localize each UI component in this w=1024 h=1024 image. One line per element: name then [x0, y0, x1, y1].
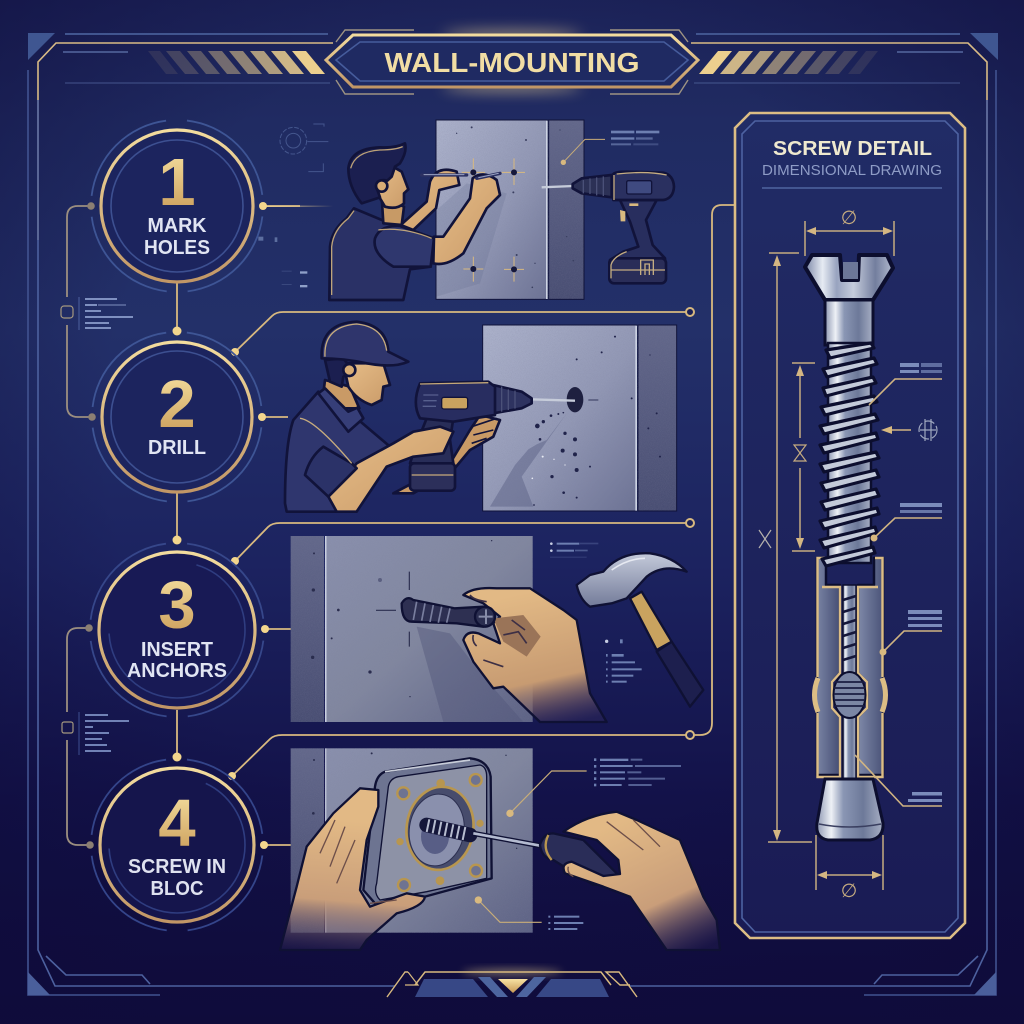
threaded part [828, 343, 871, 563]
step 3 badge: INSERT [141, 639, 213, 661]
step 4 badge [91, 759, 263, 931]
step 1 badge [91, 120, 263, 292]
header: title plate [148, 30, 878, 94]
head [805, 255, 893, 300]
hammer [577, 553, 703, 707]
panel: screw detail [735, 113, 965, 938]
screw [805, 255, 893, 840]
stripes left [148, 51, 325, 74]
panel subtitle: DIMENSIONAL DRAWING [762, 162, 942, 179]
worker [285, 322, 575, 512]
target icon [280, 124, 328, 172]
step 2 badge [92, 332, 262, 502]
step 4 badge: SCREW IN [128, 856, 226, 878]
left hand [280, 788, 720, 950]
concrete wall [483, 325, 637, 511]
step 4 badge: BLOC [150, 878, 204, 900]
dimension lines [759, 221, 894, 890]
shadow and dust [490, 413, 567, 507]
marking pencils [422, 173, 500, 178]
step 4 badge: 4 [158, 786, 196, 861]
step 2 badge: 2 [158, 367, 196, 442]
scene 3: insert anchors [291, 536, 703, 722]
cordless drill [542, 172, 674, 283]
step 3 badge: 3 [158, 568, 196, 643]
step 3 badge: ANCHORS [127, 660, 227, 682]
panel: screw detail: ∅ [841, 208, 857, 229]
hole marks [462, 158, 525, 282]
step 1 badge: MARK [148, 215, 207, 237]
screw and screwdriver [427, 825, 470, 835]
stripes right [699, 51, 878, 74]
anchor tip [817, 779, 883, 840]
front arm [328, 427, 453, 512]
concrete wall [291, 536, 324, 722]
scene 1: mark holes [258, 120, 674, 300]
step 1 badge: 1 [158, 145, 196, 220]
plastic anchor [402, 598, 492, 627]
title: WALL-MOUNTING [384, 47, 640, 78]
worker [329, 143, 500, 300]
concrete wall [436, 120, 547, 299]
notes [550, 542, 642, 683]
concrete wall [291, 748, 324, 933]
rear arm [393, 415, 500, 493]
footer ornament [387, 969, 637, 997]
connector end markers [85, 202, 694, 849]
panel heading: SCREW DETAIL [773, 138, 932, 160]
micro notes [258, 237, 307, 287]
battery and grip [410, 418, 453, 463]
scene 4: screw in bloc [280, 748, 720, 950]
leader and note [563, 139, 605, 162]
callouts [855, 379, 942, 806]
panel: screw detail: ∅ [841, 881, 857, 902]
side note: lower [62, 712, 129, 755]
step 1 badge: HOLES [144, 237, 210, 259]
scene 2: drill [285, 322, 677, 512]
step 2 badge: DRILL [148, 437, 206, 459]
side note: upper [61, 297, 133, 330]
anchor sleeve [814, 558, 886, 775]
rear fingers [472, 418, 497, 443]
leaders and notes [478, 771, 587, 922]
step 3 badge [90, 543, 264, 717]
right hand [563, 812, 720, 950]
gasket ring [401, 782, 479, 874]
core [843, 585, 856, 780]
drill hole [567, 387, 583, 412]
gripping hand [463, 588, 607, 722]
chuck and body [530, 399, 575, 401]
shank [825, 300, 873, 345]
mounting plate [363, 758, 492, 903]
connectors between steps [67, 205, 735, 845]
